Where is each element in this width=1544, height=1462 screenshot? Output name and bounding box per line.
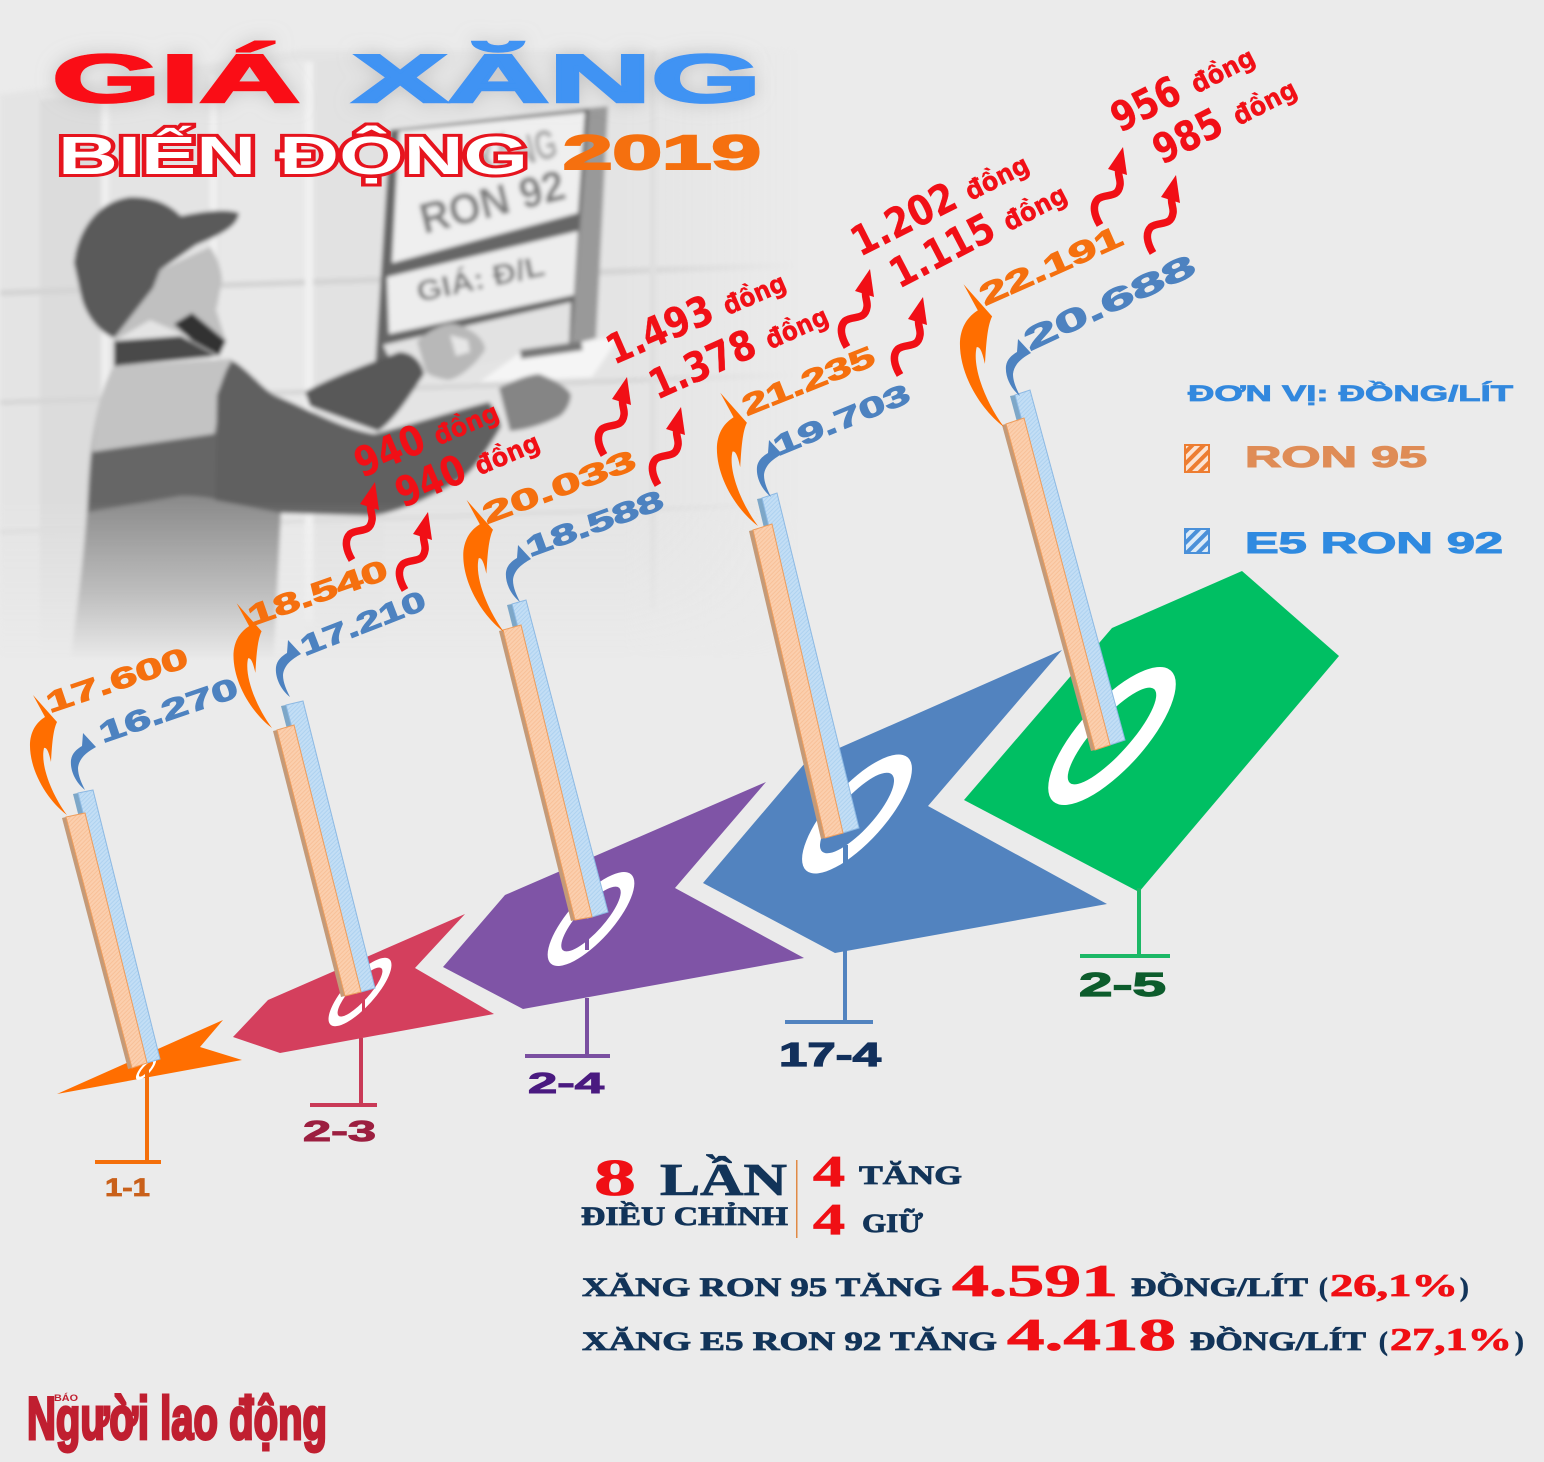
timeline base: 17-4 <box>703 650 1107 1073</box>
summary: E5 RON 92 increase: ĐỒNG/LÍT <box>1190 1327 1366 1356</box>
summary: 8 adjustments: GIỮ <box>862 1209 923 1238</box>
summary: 8 adjustments: 4 <box>813 1195 845 1244</box>
summary: E5 RON 92 increase: XĂNG E5 RON 92 TĂNG <box>582 1327 997 1356</box>
title line 1: GIÁ XĂNG: XĂNG <box>353 41 761 117</box>
summary: 8 adjustments: LẦN <box>660 1153 787 1205</box>
logo: Người lao động: BÁO <box>54 1393 78 1403</box>
title year: 2019: 2019 <box>563 127 761 180</box>
increase amounts: đồng <box>960 149 1035 207</box>
price column 17-4 <box>717 137 1074 839</box>
price column 1-1: 16.270 <box>95 672 242 750</box>
price column 2-4: 1.378 <box>642 320 763 409</box>
price column 2-5 <box>960 29 1304 751</box>
photo: worker changing the fuel price sign: RON 92 <box>415 161 570 244</box>
near arm <box>215 362 501 516</box>
legend <box>1185 381 1514 560</box>
price column 2-5: 20.688 <box>1018 248 1201 357</box>
summary: RON 95 increase: 4.591 <box>952 1255 1118 1306</box>
increase amounts <box>1103 29 1262 142</box>
legend swatch: RON 95 <box>1185 445 1209 472</box>
increase amounts: đồng <box>1186 42 1260 100</box>
timeline base: 2-4 <box>443 782 804 1100</box>
cap <box>74 197 239 338</box>
price column 17-4: 19.703 <box>769 378 914 462</box>
increase arrows <box>1094 147 1180 253</box>
price column 2-5: đồng <box>1228 74 1302 132</box>
increase amounts: đồng <box>429 397 504 452</box>
price column 2-5: 985 <box>1145 98 1231 174</box>
collar and face <box>114 336 217 366</box>
increase amounts <box>599 254 792 374</box>
timeline base: 2-3: 2-3 <box>303 1116 376 1148</box>
price column 17-4: 21.235 <box>738 341 880 422</box>
logo: Người lao động <box>27 1385 327 1452</box>
legend label: E5 RON 92: E5 RON 92 <box>1245 527 1503 560</box>
summary: RON 95 increase: ( <box>1319 1273 1328 1302</box>
timeline base: 2-5: 2-5 <box>1079 966 1166 1003</box>
increase amounts: 940 <box>347 415 432 487</box>
increase amounts: đồng <box>718 267 791 322</box>
timeline base: 2-5 <box>964 571 1339 1003</box>
price column 2-3: đồng <box>470 427 545 482</box>
price column 2-3: 18.540 <box>244 554 392 633</box>
price column 2-4: đồng <box>761 301 833 356</box>
summary: 8 adjustments: ĐIỀU CHỈNH <box>581 1202 788 1231</box>
far arm and hand <box>305 352 424 431</box>
legend label: RON 95: RON 95 <box>1245 441 1427 474</box>
price column 1-1 <box>30 642 242 1069</box>
summary: RON 95 increase: ĐỒNG/LÍT <box>1131 1273 1308 1302</box>
summary: 8 adjustments: TĂNG <box>859 1161 962 1190</box>
price column 2-4: 18.588 <box>521 484 667 563</box>
increase amounts <box>843 137 1036 266</box>
increase arrows <box>841 269 927 375</box>
summary: RON 95 increase: ) <box>1460 1273 1469 1302</box>
price column 1-1: 17.600 <box>42 642 193 720</box>
summary: E5 RON 92 increase <box>582 1309 1524 1360</box>
photo: worker changing the fuel price sign: XĂNG <box>471 119 562 185</box>
logo: Người lao động: Người lao động <box>27 1385 327 1452</box>
increase amounts: 1.202 <box>843 173 964 266</box>
increase amounts <box>347 384 505 487</box>
sign board <box>374 108 590 385</box>
timeline base: 1-1: 1-1 <box>105 1174 150 1202</box>
summary: RON 95 increase <box>582 1255 1469 1306</box>
price column 17-4: 1.115 <box>881 204 1003 298</box>
increase arrows <box>346 482 432 590</box>
increase amounts: 1.493 <box>599 285 721 374</box>
price column 2-3: 17.210 <box>296 585 430 662</box>
timeline base: 17-4: 17-4 <box>779 1036 882 1073</box>
legend unit: ĐƠN VỊ: ĐỒNG/LÍT <box>1188 381 1514 406</box>
paper <box>484 338 615 382</box>
photo: worker changing the fuel price sign <box>0 51 728 648</box>
title <box>52 41 761 186</box>
timeline base: 2-4: 2-4 <box>528 1068 604 1100</box>
summary: E5 RON 92 increase: 4.418 <box>1007 1309 1176 1360</box>
legend swatch: E5 RON 92 <box>1185 529 1209 553</box>
timeline base: 1-1 <box>57 1020 242 1202</box>
price column 17-4: đồng <box>998 179 1073 238</box>
increase amounts: 956 <box>1103 66 1189 142</box>
title line 1: GIÁ XĂNG: GIÁ <box>52 41 300 117</box>
summary: 8 adjustments: 8 <box>594 1150 636 1207</box>
price column 2-4: 20.033 <box>478 445 640 531</box>
torso <box>70 359 281 660</box>
summary: E5 RON 92 increase: 27,1% <box>1390 1321 1512 1357</box>
price column 2-4 <box>463 254 835 921</box>
photo: worker changing the fuel price sign: GIÁ: Đ/L <box>413 249 548 309</box>
summary: 8 adjustments <box>581 1147 962 1244</box>
title line 1: GIÁ XĂNG <box>52 41 761 117</box>
summary: E5 RON 92 increase: ) <box>1515 1327 1524 1356</box>
price column 2-3 <box>233 384 546 997</box>
price column 2-3: 940 <box>388 445 473 517</box>
title line 2: BIẾN ĐỘNG: BIẾN ĐỘNG <box>58 125 528 186</box>
summary: RON 95 increase: XĂNG RON 95 TĂNG <box>582 1273 942 1302</box>
summary: E5 RON 92 increase: ( <box>1379 1327 1388 1356</box>
summary: 8 adjustments: 4 <box>813 1147 845 1196</box>
price column 2-5: 22.191 <box>974 220 1128 312</box>
increase arrows <box>598 377 685 485</box>
summary: RON 95 increase: 26,1% <box>1330 1267 1458 1303</box>
timeline base: 2-3 <box>233 914 494 1148</box>
